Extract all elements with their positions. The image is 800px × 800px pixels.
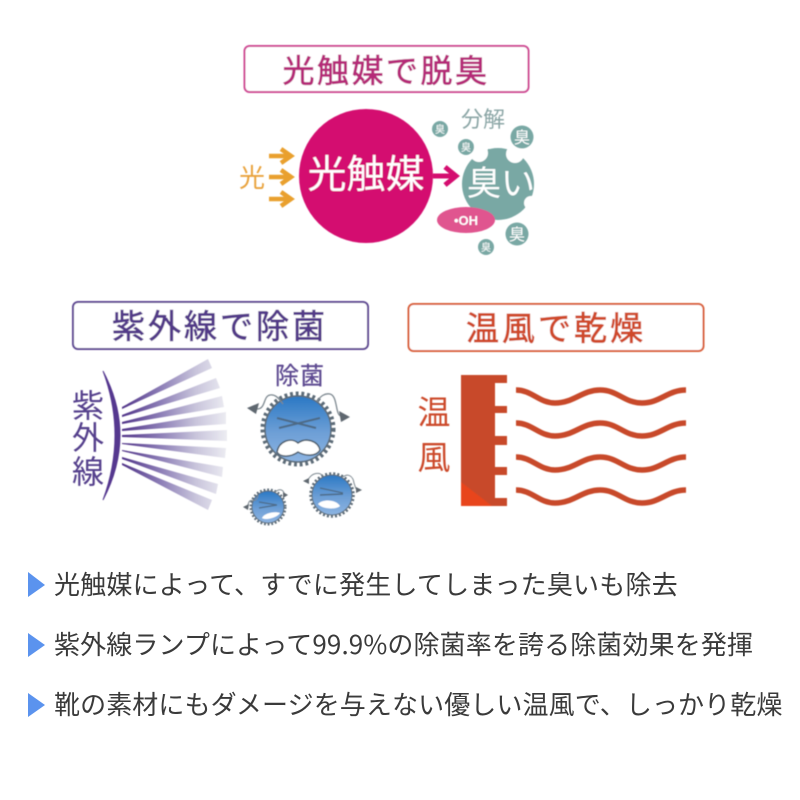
icon: medium germ xyxy=(303,473,362,516)
OH radical: •OH xyxy=(454,213,478,228)
icon: large germ xyxy=(247,394,350,464)
label: light: 光 xyxy=(239,158,265,195)
odor particles: 臭 xyxy=(481,239,491,254)
odor particles: 臭 xyxy=(509,221,525,245)
odor molecule: 臭い xyxy=(467,156,535,205)
label: ultraviolet vertical: 紫 xyxy=(72,381,104,427)
icon: UV lamp bow xyxy=(103,371,120,500)
icon: warm air waves xyxy=(516,390,686,503)
bullet item 2: 紫外線ランプによって99.9%の除菌率を誇る除菌効果を発揮 xyxy=(54,625,753,662)
arrow: reaction xyxy=(433,167,456,185)
odor molecule xyxy=(462,144,538,220)
icon: heater xyxy=(461,375,507,506)
heading: warm air xyxy=(408,302,704,351)
panel: warm air drying xyxy=(408,302,704,506)
odor particles: 臭 xyxy=(514,124,530,148)
panel: photocatalyst deodorizing xyxy=(239,46,538,255)
label: ultraviolet vertical: 線 xyxy=(72,447,104,493)
label: ultraviolet vertical: 外 xyxy=(72,413,104,459)
label: ultraviolet vertical xyxy=(72,381,104,493)
label: warm air vertical: 風 xyxy=(418,431,450,479)
photocatalyst circle xyxy=(299,109,433,243)
feature list xyxy=(28,565,782,722)
label: warm air vertical: 温 xyxy=(418,386,450,434)
label: decomposition: 分解 xyxy=(461,102,505,134)
heading: warm air: 温風で乾燥 xyxy=(466,302,646,350)
photocatalyst circle: 光触媒 xyxy=(307,144,425,200)
heading: ultraviolet: 紫外線で除菌 xyxy=(112,300,328,348)
odor particles: 臭 xyxy=(461,139,471,154)
panel: ultraviolet sterilization xyxy=(72,300,368,524)
label: sterilization: 除菌 xyxy=(275,356,325,391)
OH radical xyxy=(437,207,495,233)
icon: small germ xyxy=(243,490,288,524)
odor particles: 臭 xyxy=(435,121,445,136)
odor particles xyxy=(432,121,534,255)
label: warm air vertical xyxy=(418,386,450,479)
icon: UV rays xyxy=(122,359,227,510)
bullet item 1: 光触媒によって、すでに発生してしまった臭いも除去 xyxy=(54,565,678,602)
bullet item 3: 靴の素材にもダメージを与えない優しい温風で、しっかり乾燥 xyxy=(54,685,782,722)
heading: photocatalyst: 光触媒で脱臭 xyxy=(282,46,490,92)
icon: light arrows xyxy=(269,149,291,206)
